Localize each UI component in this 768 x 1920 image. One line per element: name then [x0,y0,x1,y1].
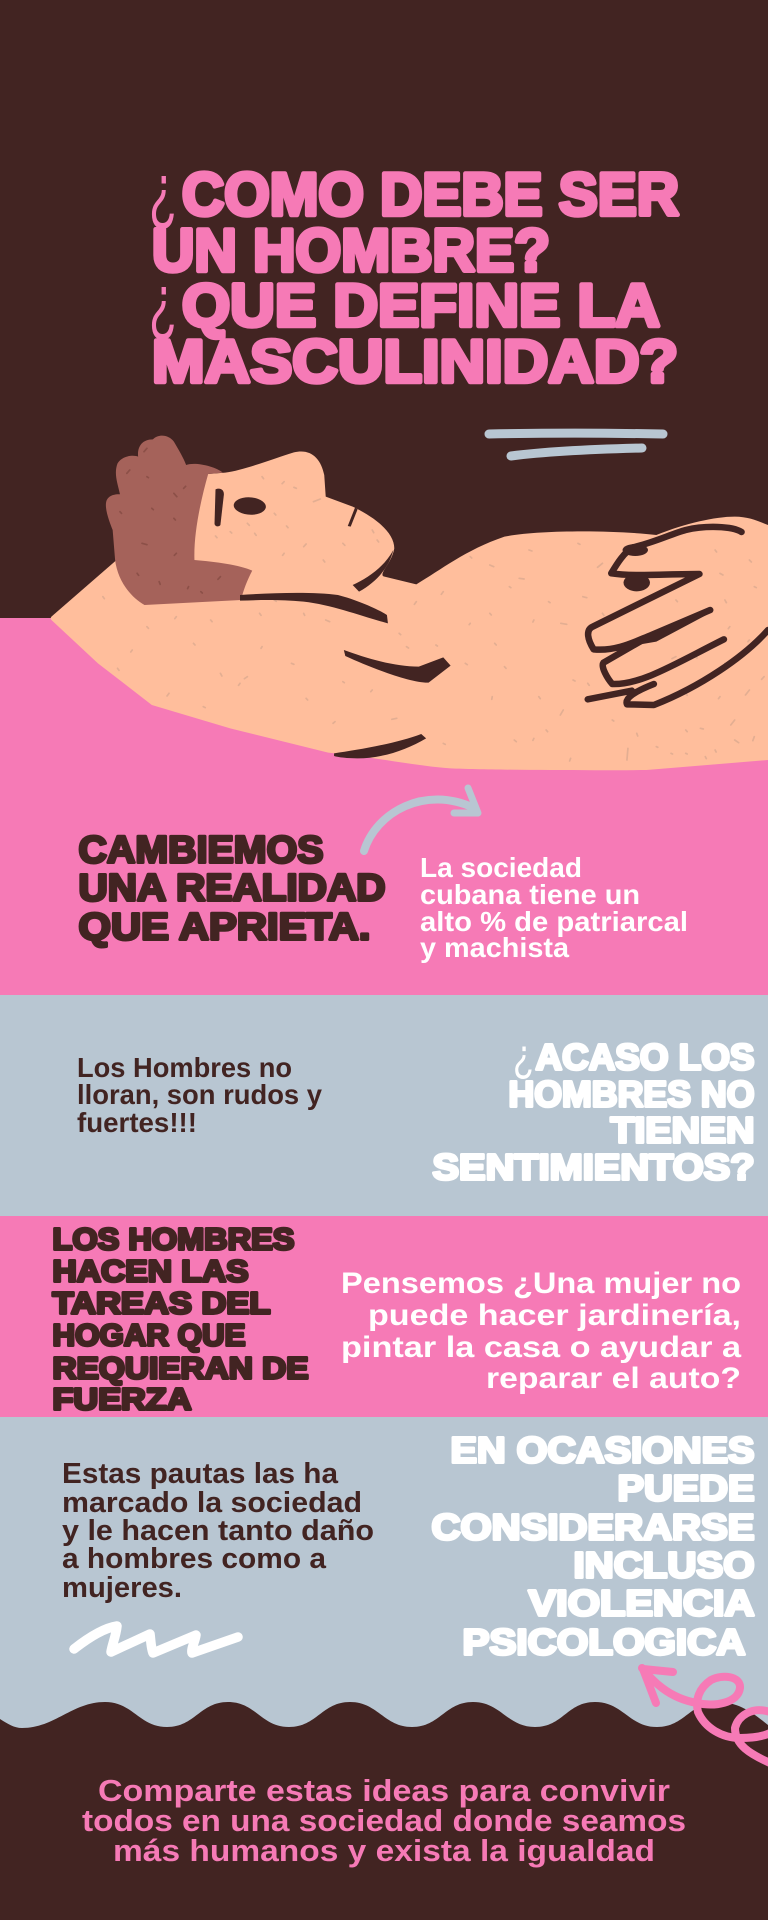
heading: en ocasiones violencia psicologica: VIOLENCIA [528,1582,754,1624]
heading: acaso los hombres no tienen sentimientos [432,1029,754,1188]
heading: cambiemos una realidad [78,830,386,948]
text: pensemos: Pensemos ¿Una mujer no [341,1267,741,1300]
heading: los hombres hacen las tareas: HOGAR QUE [52,1318,246,1352]
title: COMO DEBE SER [182,161,679,228]
title: QUE DEFINE LA [182,272,660,339]
text: los hombres no lloran: lloran, son rudos y [77,1079,323,1110]
icon: white squiggle [74,1626,238,1653]
heading: acaso los hombres no tienen sentimientos: ACASO LOS [536,1036,754,1078]
text: la sociedad cubana: y machista [420,932,570,963]
heading: los hombres hacen las tareas: HACEN LAS [52,1254,248,1288]
text: pensemos [341,1267,741,1395]
text: estas pautas: mujeres. [62,1572,182,1604]
text: la sociedad cubana [420,852,688,963]
text: los hombres no lloran: Los Hombres no [77,1052,292,1083]
text: estas pautas: marcado la sociedad [62,1487,362,1519]
text: pensemos: puede hacer jardinería, [368,1299,741,1332]
skin body and head [51,451,768,770]
heading: los hombres hacen las tareas [52,1222,308,1416]
closing message: más humanos y exista la igualdad [113,1833,655,1868]
title: ¿ [149,259,177,344]
heading: los hombres hacen las tareas: REQUIERAN DE [52,1350,308,1386]
hand [588,527,768,705]
closing message: todos en una sociedad donde seamos [82,1803,686,1838]
heading: acaso los hombres no tienen sentimientos: TIENEN [610,1110,754,1150]
text: la sociedad cubana: alto % de patriarcal [420,906,688,937]
title: UN HOMBRE? [152,217,550,284]
decorative blue double lines [489,433,663,456]
text: estas pautas [62,1458,374,1604]
panel: pink tareas [0,1216,768,1417]
text: estas pautas: Estas pautas las ha [62,1458,339,1490]
heading: los hombres hacen las tareas: FUERZA [52,1382,192,1416]
text: estas pautas: y le hacen tanto daño [62,1515,374,1547]
wave divider [0,1702,768,1920]
heading: cambiemos una realidad: CAMBIEMOS [78,830,324,872]
heading: acaso los hombres no tienen sentimientos: SENTIMIENTOS? [432,1146,754,1188]
illustration: reclining man [51,436,768,770]
heading: en ocasiones violencia psicologica: INCLUSO [574,1544,754,1586]
title: ¿ [149,148,177,233]
title [149,148,679,395]
heading: los hombres hacen las tareas: LOS HOMBRES [52,1222,294,1256]
heading: cambiemos una realidad: QUE APRIETA. [78,906,370,948]
text: pensemos: reparar el auto? [486,1362,741,1395]
text: la sociedad cubana: cubana tiene un [420,879,640,910]
heading: en ocasiones violencia psicologica: CONSIDERARSE [432,1506,754,1548]
text: la sociedad cubana: La sociedad [420,852,582,883]
skin speckles [103,477,764,761]
heading: cambiemos una realidad: UNA REALIDAD [78,868,386,910]
text: pensemos: pintar la casa o ayudar a [341,1331,741,1364]
text: estas pautas: a hombres como a [62,1543,327,1575]
closing message [82,1773,686,1868]
hair [106,436,252,605]
arrow: blue curved [364,788,478,851]
text: los hombres no lloran: fuertes!!! [77,1107,197,1138]
panel: blue sentimientos [0,995,768,1216]
heading: en ocasiones violencia psicologica: PUEDE [618,1468,754,1508]
hair speckles [120,448,220,593]
panel: blue violencia [0,1417,768,1737]
heading: acaso los hombres no tienen sentimientos: HOMBRES NO [508,1074,754,1114]
heading: en ocasiones violencia psicologica [432,1430,754,1662]
heading: en ocasiones violencia psicologica: PSICOLOGICA [462,1622,746,1662]
panel: pink realidad [0,618,768,995]
heading: acaso los hombres no tienen sentimientos: ¿ [513,1029,534,1081]
body fold lines [334,650,451,758]
text: los hombres no lloran [77,1052,323,1138]
heading: los hombres hacen las tareas: TAREAS DEL [52,1286,270,1320]
title: MASCULINIDAD? [152,328,678,395]
face: eyebrow, eye, nose, mouth, jaw [215,489,393,623]
arrow: pink curly [642,1668,768,1763]
closing message: Comparte estas ideas para convivir [98,1773,670,1808]
heading: en ocasiones violencia psicologica: EN OCASIONES [450,1430,754,1470]
